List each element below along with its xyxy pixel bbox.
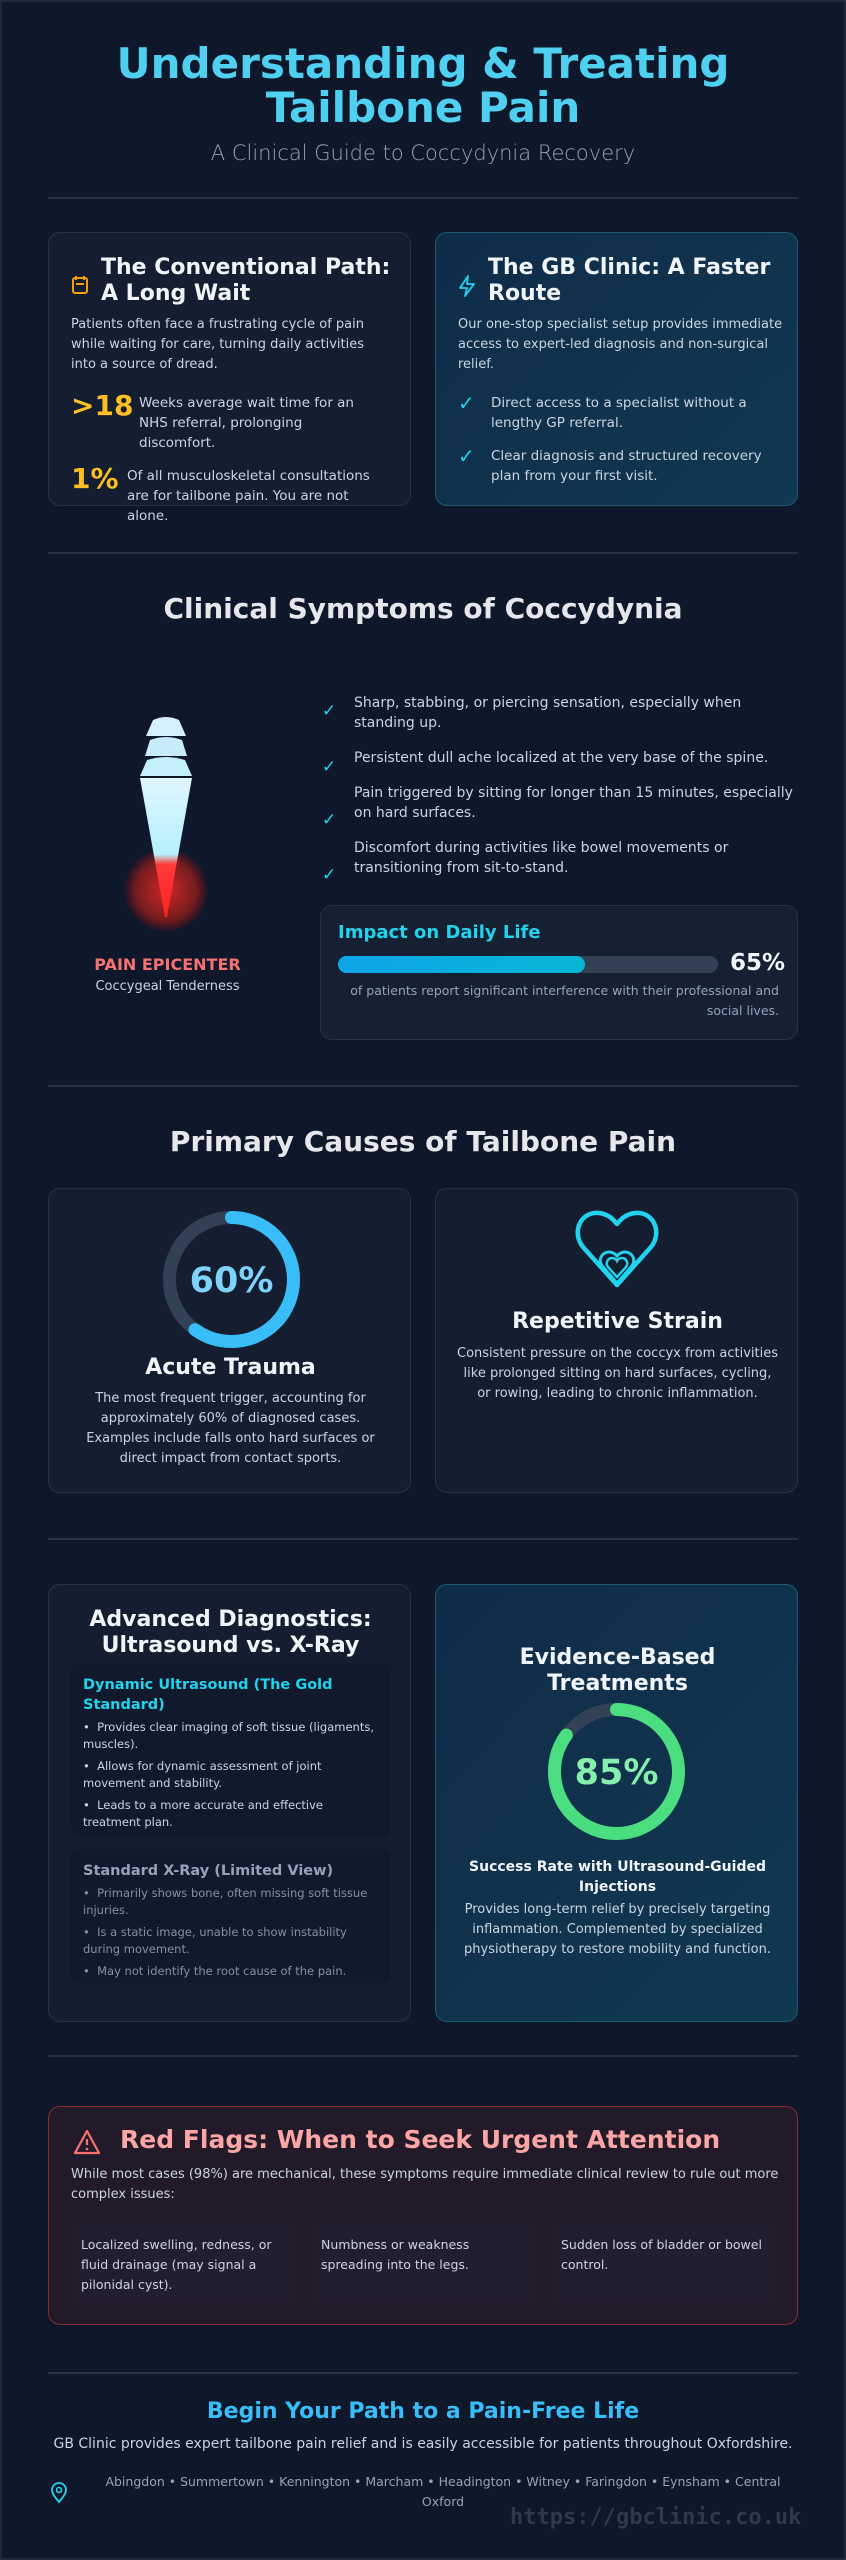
sub-panel: x-ray: • Primarily shows bone, often missing soft tissue injuries. (83, 1886, 367, 1917)
icon: warning (74, 2130, 100, 2154)
heading: Impact on Daily Life (338, 922, 541, 943)
stat: 1%: 1% (71, 462, 119, 495)
text: Our one-stop specialist setup provides immediate access to expert-led diagnosis and non-surgical relief. (458, 317, 782, 372)
heading: Red Flags: When to Seek Urgent Attention (120, 2125, 720, 2154)
panel: impact on daily life (320, 905, 798, 1040)
panel: GB clinic (435, 232, 798, 506)
donut chart 60%: 60% (190, 1261, 273, 1301)
heading: Ultrasound vs. X-Ray (102, 1633, 359, 1658)
benefit list: ✓ (458, 391, 475, 415)
symptom checklist: Discomfort during activities like bowel movements or transitioning from sit-to-stand. (354, 840, 728, 876)
heading: Repetitive Strain (512, 1309, 723, 1334)
label: pain epicenter: Coccygeal Tenderness (95, 979, 240, 994)
heading (101, 255, 390, 306)
heading (488, 255, 770, 306)
heading: A Long Wait (101, 281, 250, 306)
heading: Route (488, 281, 561, 306)
icon: location pin (51, 2482, 67, 2504)
panel: acute trauma (48, 1188, 411, 1493)
text: While most cases (98%) are mechanical, these symptoms require immediate clinical review to rule out more complex issues: (71, 2167, 778, 2202)
footer heading: Begin Your Path to a Pain-Free Life (207, 2399, 639, 2424)
label: pain epicenter: PAIN EPICENTER (94, 955, 241, 974)
label: pain epicenter (94, 955, 241, 994)
symptom checklist: Persistent dull ache localized at the very base of the spine. (354, 750, 768, 766)
flag items: Localized swelling, redness, or fluid drainage (may signal a pilonidal cyst). (81, 2237, 272, 2292)
stat: >18 (71, 389, 354, 451)
benefit list: Direct access to a specialist without a lengthy GP referral. (491, 395, 747, 431)
panel: red flags (48, 2106, 798, 2325)
benefit list: Clear diagnosis and structured recovery plan from your first visit. (491, 448, 762, 484)
heading: causes: Primary Causes of Tailbone Pain (170, 1125, 676, 1158)
symptom checklist: Sharp, stabbing, or piercing sensation, especially when standing up. (354, 695, 741, 731)
subheading: Success Rate with Ultrasound-Guided Injections (469, 1859, 766, 1895)
flag items (81, 2237, 762, 2292)
stat 65%: 65% (730, 950, 785, 976)
sub-panel: ultrasound: • Allows for dynamic assessment of joint movement and stability. (83, 1759, 322, 1790)
panel: treatments (435, 1584, 798, 2022)
symptom checklist: ✓ (322, 701, 336, 721)
heading: Acute Trauma (145, 1355, 316, 1380)
url: https://gbclinic.co.uk (510, 2505, 801, 2530)
symptom checklist: Pain triggered by sitting for longer than 15 minutes, especially on hard surfaces. (354, 785, 793, 821)
heading: Advanced Diagnostics: (89, 1607, 372, 1632)
flag items: Numbness or weakness spreading into the legs. (321, 2237, 469, 2272)
symptom checklist: ✓ (322, 757, 336, 777)
icon: lightning (459, 275, 475, 297)
icon: calendar (72, 276, 88, 294)
stat: 1%: Of all musculoskeletal consultations are for tailbone pain. You are not alone. (127, 468, 370, 524)
heading (89, 1607, 372, 1658)
flag items: Sudden loss of bladder or bowel control. (561, 2237, 762, 2272)
progress bar 65% (338, 956, 718, 973)
benefit list (458, 391, 762, 484)
stat: >18: >18 (71, 389, 133, 422)
sub-panel: x-ray: • May not identify the root cause of the pain. (83, 1964, 346, 1978)
heading: The GB Clinic: A Faster (488, 255, 770, 280)
title: Tailbone Pain (266, 83, 580, 132)
sub-panel: ultrasound (71, 1663, 391, 1836)
caption: of patients report significant interference with their professional and social lives. (350, 983, 779, 1018)
sub-panel: ultrasound: • Provides clear imaging of soft tissue (ligaments, muscles). (83, 1720, 374, 1751)
subtitle: A Clinical Guide to Coccydynia Recovery (211, 141, 635, 165)
text: The most frequent trigger, accounting for approximately 60% of diagnosed cases. Examples include falls onto hard surfaces or direct impact from contact sports. (86, 1391, 375, 1466)
heading: The Conventional Path: (101, 255, 390, 280)
text: Patients often face a frustrating cycle of pain while waiting for care, turning daily activities into a source of dread. (71, 317, 364, 372)
text: Provides long-term relief by precisely targeting inflammation. Complemented by specialized physiotherapy to restore mobility and function. (464, 1902, 771, 1957)
symptom checklist (322, 695, 793, 885)
sub-panel: x-ray: • Is a static image, unable to show instability during movement. (83, 1925, 347, 1956)
stat: >18: Weeks average wait time for an NHS referral, prolonging discomfort. (139, 395, 354, 451)
panel: diagnostics (48, 1584, 411, 2022)
locations: Abingdon • Summertown • Kennington • Marcham • Headington • Witney • Faringdon • Eynsham • Central Oxford (105, 2474, 781, 2509)
heading: symptoms: Clinical Symptoms of Coccydynia (163, 592, 683, 625)
heading (520, 1645, 715, 1696)
donut chart 85%: 85% (575, 1753, 658, 1793)
symptom checklist: ✓ (322, 810, 336, 830)
title (117, 39, 729, 132)
footer text: GB Clinic provides expert tailbone pain relief and is easily accessible for patients throughout Oxfordshire. (53, 2436, 793, 2452)
title: Understanding & Treating (117, 39, 729, 88)
panel: conventional path (48, 232, 411, 506)
heading: Evidence-Based (520, 1645, 715, 1670)
heading: Treatments (547, 1671, 688, 1696)
panel: repetitive strain (435, 1188, 798, 1493)
icon: hearts (576, 1210, 658, 1288)
donut chart 60% (163, 1211, 300, 1348)
symptom checklist: ✓ (322, 865, 336, 885)
sub-panel: ultrasound: Dynamic Ultrasound (The Gold Standard) (83, 1677, 333, 1713)
sub-panel: x-ray: Standard X-Ray (Limited View) (83, 1863, 333, 1879)
icon: spine figure (125, 717, 207, 931)
sub-panel: x-ray (71, 1849, 391, 1983)
benefit list: ✓ (458, 444, 475, 468)
text: Consistent pressure on the coccyx from activities like prolonged sitting on hard surfaces, cycling, or rowing, leading to chronic inflammation. (457, 1346, 778, 1401)
sub-panel: ultrasound: • Leads to a more accurate and effective treatment plan. (83, 1798, 323, 1829)
donut chart 85% (548, 1703, 685, 1840)
